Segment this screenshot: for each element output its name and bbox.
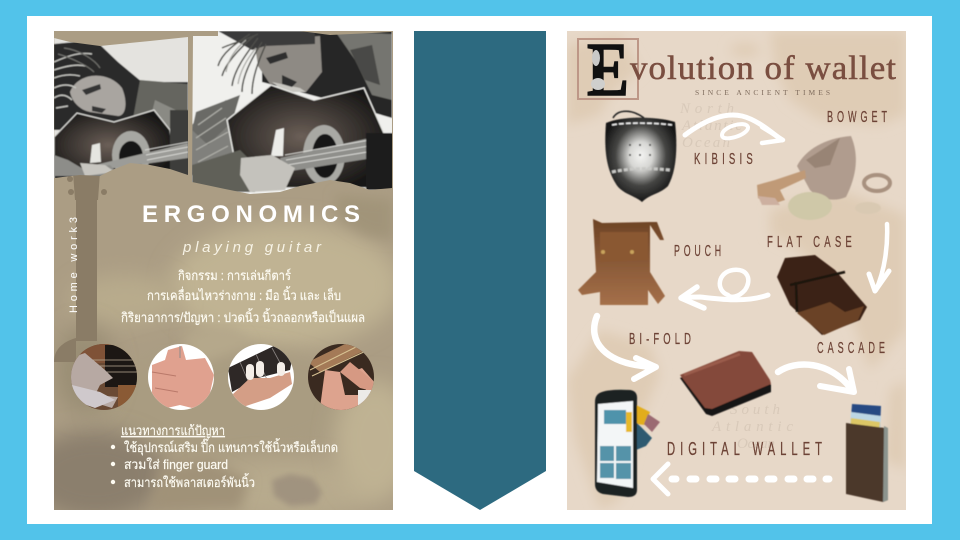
guitar silhouette xyxy=(54,172,107,362)
text block: activity details: กิจกรรม : การเล่นกีตาร์ xyxy=(178,268,291,283)
solutions list: สวมใส่ finger guard xyxy=(124,457,228,472)
photo circle: finger guards hand xyxy=(148,343,216,411)
icon: cascade card wallet xyxy=(846,404,888,502)
arrow: flat case to pouch xyxy=(681,270,768,308)
map ocean text: Ocean xyxy=(682,135,730,151)
icon: bowget leather pouch xyxy=(757,136,890,220)
label: FLAT CASE: FLAT CASE xyxy=(767,234,856,251)
subtitle: since ancient times: SINCE ANCIENT TIMES xyxy=(695,88,830,97)
panel: ergonomics poster xyxy=(54,31,393,510)
decorative frame with initial E xyxy=(577,38,639,100)
icon: brown leather pouch xyxy=(578,219,665,305)
map ocean text: Ocean xyxy=(737,436,775,452)
label: CASCADE: CASCADE xyxy=(817,340,889,357)
arrow: pouch to bi-fold xyxy=(594,316,656,379)
map ocean text: Atlantic xyxy=(681,118,742,134)
map ocean text: Atlantic xyxy=(711,419,793,435)
icon: kibisis basket xyxy=(605,111,676,202)
center ribbon banner xyxy=(414,31,546,510)
watercolor stains xyxy=(54,200,393,510)
solutions heading: แนวทางการแก้ปัญหา xyxy=(121,423,225,438)
map ocean text: South xyxy=(730,402,780,418)
arrow: dashed cascade to digital wallet xyxy=(653,464,829,494)
label: BI-FOLD: BI-FOLD xyxy=(629,331,695,348)
title: volution of wallet: volution of wallet xyxy=(630,50,897,87)
map ocean text xyxy=(679,101,793,452)
photo circle: guitar fingers with plasters xyxy=(308,343,376,411)
icon: flat case wallet xyxy=(777,255,867,335)
arrow: bi-fold to cascade xyxy=(778,365,854,392)
icon: smartphone with cards xyxy=(595,390,660,497)
arrow: kibisis to bowget xyxy=(685,115,783,143)
text block: activity details: การเคลื่อนไหวร่างกาย : มือ นิ้ว และ เล็บ xyxy=(147,286,341,303)
text block: activity details: กิริยาอาการ/ปัญหา : ปวดนิ้ว นิ้วถลอกหรือเป็นแผล xyxy=(121,308,365,325)
photo: guitarist left xyxy=(54,30,190,180)
solutions list: สามารถใช้พลาสเตอร์พันนิ้ว xyxy=(124,473,255,490)
photo circle: picking hand xyxy=(70,343,139,411)
subtitle: playing guitar: playing guitar xyxy=(182,239,322,256)
title: ERGONOMICS: ERGONOMICS xyxy=(142,201,360,228)
map ocean text: North xyxy=(679,101,734,117)
solutions list: ใช้อุปกรณ์เสริม ปิ๊ก แทนการใช้นิ้วหรือเล็บกด xyxy=(124,438,338,456)
icon: bi-fold wallet xyxy=(680,351,771,416)
label: BOWGET: BOWGET xyxy=(827,109,891,126)
text block: activity details xyxy=(121,268,365,325)
world map background xyxy=(567,31,906,510)
photo circle: fingers on fretboard xyxy=(228,343,296,411)
label: DIGITAL WALLET: DIGITAL WALLET xyxy=(667,439,827,459)
panel: evolution of wallet poster xyxy=(567,28,906,510)
side label: Home work3: Home work3 xyxy=(68,217,80,313)
arrow: bowget to flat case xyxy=(869,224,889,291)
label: KIBISIS: KIBISIS xyxy=(694,151,757,168)
label: POUCH: POUCH xyxy=(674,243,725,260)
photo: guitarist right xyxy=(191,30,394,195)
solutions list xyxy=(111,438,338,490)
decorative frame with initial E: E xyxy=(587,28,629,112)
